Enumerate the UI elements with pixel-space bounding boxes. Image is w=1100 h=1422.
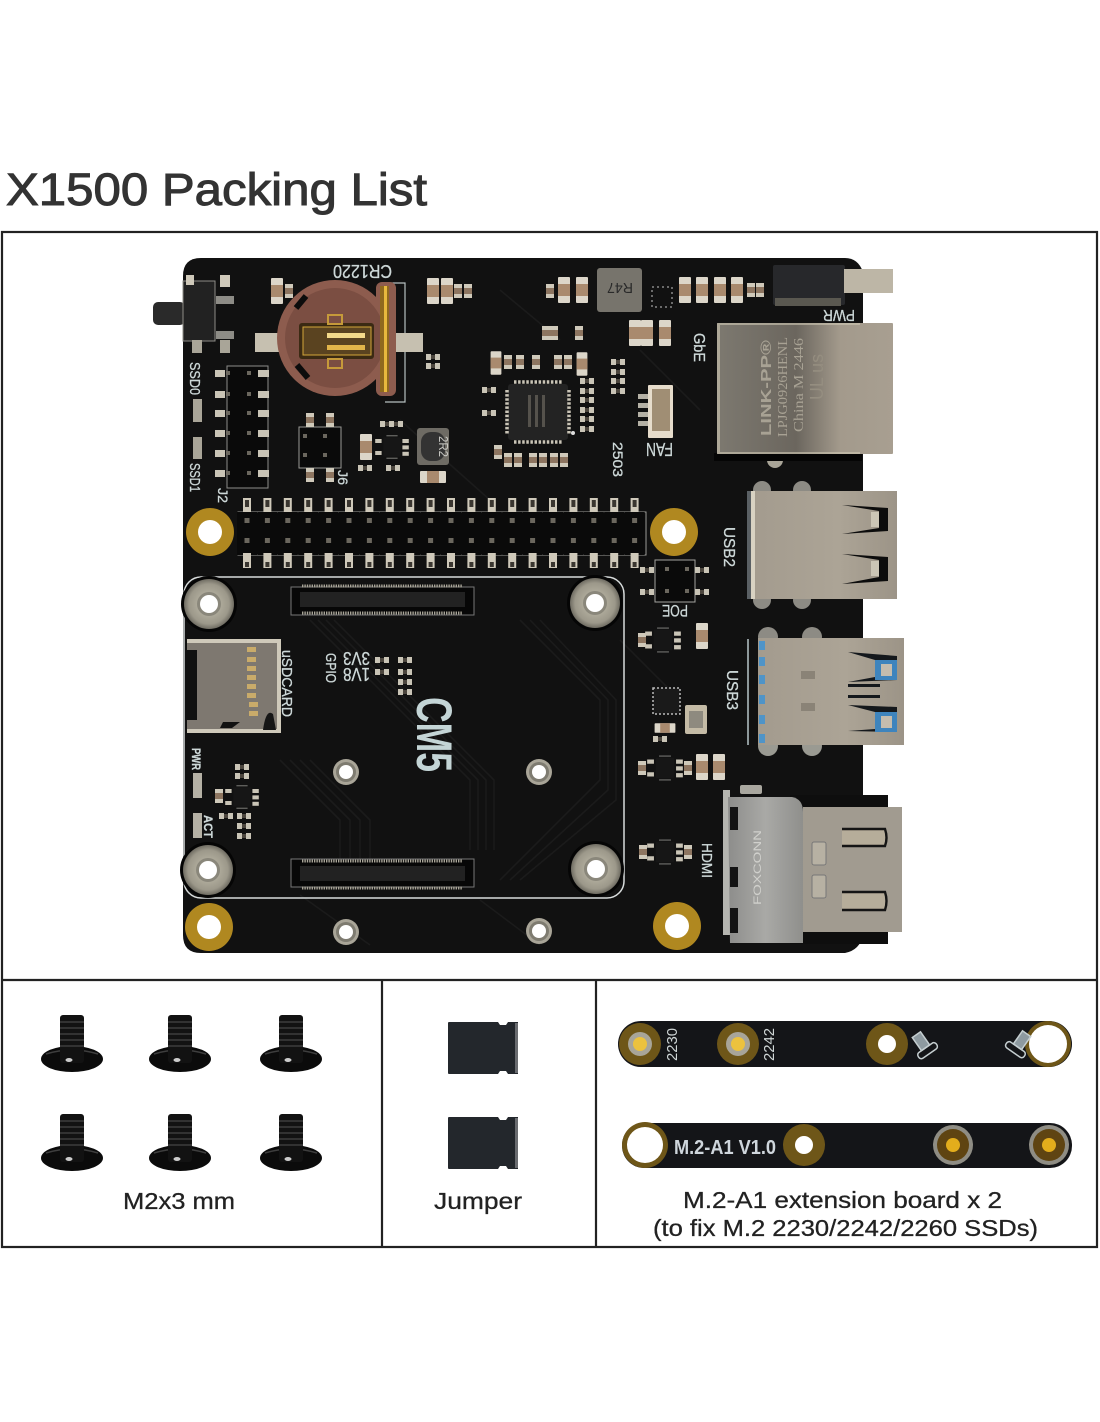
extension board top [618,1021,1072,1067]
label: POE: POE [662,601,688,620]
inductor R47 [597,268,642,312]
jumper 2 [448,1117,518,1169]
40-pin GPIO header [237,498,646,568]
LED: ACT [193,813,202,838]
bottom CM5 connector [291,859,474,888]
extension board bottom: M.2-A1 V1.0 [674,1137,776,1159]
power regulator cluster: 2R2 [436,436,451,457]
ethernet jack: UL us [807,354,827,400]
caption: extension board [653,1187,1038,1241]
label: SSD0: SSD0 [186,362,203,395]
ethernet jack: China M 2446 [792,338,807,432]
label: ACT: ACT [201,815,215,839]
caption: M2x3 mm: M2x3 mm [123,1188,235,1214]
LED: SSD1 [193,437,202,459]
right side passives [638,623,725,864]
FAN connector [638,385,673,438]
label: J6: J6 [335,470,351,485]
LED: SSD0 [193,399,202,422]
top row passives [271,277,764,369]
HDMI port: FOXCONN [752,830,764,905]
power regulator cluster [358,421,451,483]
caption: Jumper: Jumper [434,1188,522,1214]
label: USB2: USB2 [720,527,737,567]
label: SSD1: SSD1 [186,463,203,492]
LED driver cluster [215,764,259,839]
CM5 standoffs [180,575,624,945]
label: CR1220: CR1220 [333,261,392,281]
title: X1500 Packing List [6,164,428,215]
panel: screws [41,1015,322,1214]
voltage selector parts [375,657,412,695]
USB2 port [747,481,897,609]
HDMI port [723,785,902,944]
label: uSDCARD: uSDCARD [278,650,295,717]
label: CM5: CM5 [406,697,462,772]
ethernet jack: LPJG0926HENL [776,337,791,437]
caption: extension board: (to fix M.2 2230/2242/2260 SSDs) [653,1215,1038,1241]
LED: PWR [193,773,202,798]
chip passives [482,351,625,467]
panel: extension boards [618,1021,1072,1241]
panel: jumpers [434,1022,522,1214]
power switch [773,265,893,306]
ethernet jack: LINK-PP® [758,340,775,436]
extension board bottom [622,1122,1072,1168]
microSD slot [187,639,281,733]
extension board top: 2230 [664,1028,681,1061]
label: J2: J2 [215,488,231,503]
screw row 2 [41,1114,322,1171]
label: USB3: USB3 [723,670,740,710]
label: HDMI: HDMI [698,843,715,878]
pcb base [183,258,863,953]
CR1220 battery holder [255,280,423,402]
ethernet jack [714,323,893,468]
pcb traces [280,290,700,945]
label: FAN: FAN [646,439,673,459]
table frame [2,232,1097,1247]
label: 3V3: 3V3 [343,648,370,668]
label: PWR: PWR [823,306,855,323]
extension board top: 2242 [761,1028,778,1061]
J2 pin header [215,366,269,488]
label: 1V8: 1V8 [343,664,370,684]
top CM5 connector [291,586,474,615]
label: GPIO: GPIO [322,653,339,683]
label: left PWR: PWR [189,748,203,770]
power button [153,275,234,353]
inductor R47: R47 [607,279,633,296]
USB3 port [748,627,904,756]
J6 jumper [299,413,341,482]
POE jumper [640,560,709,602]
mounting holes: gold [185,508,701,951]
label: GbE: GbE [690,333,707,362]
label: board code: 2503 [610,442,626,477]
panel: main board [2,232,1097,980]
jumper 1 [448,1022,518,1074]
screw row 1 [41,1015,322,1072]
caption: extension board: M.2-A1 extension board x 2 [683,1187,1002,1213]
main controller chip [507,382,575,442]
CM5 socket outline [184,577,624,898]
